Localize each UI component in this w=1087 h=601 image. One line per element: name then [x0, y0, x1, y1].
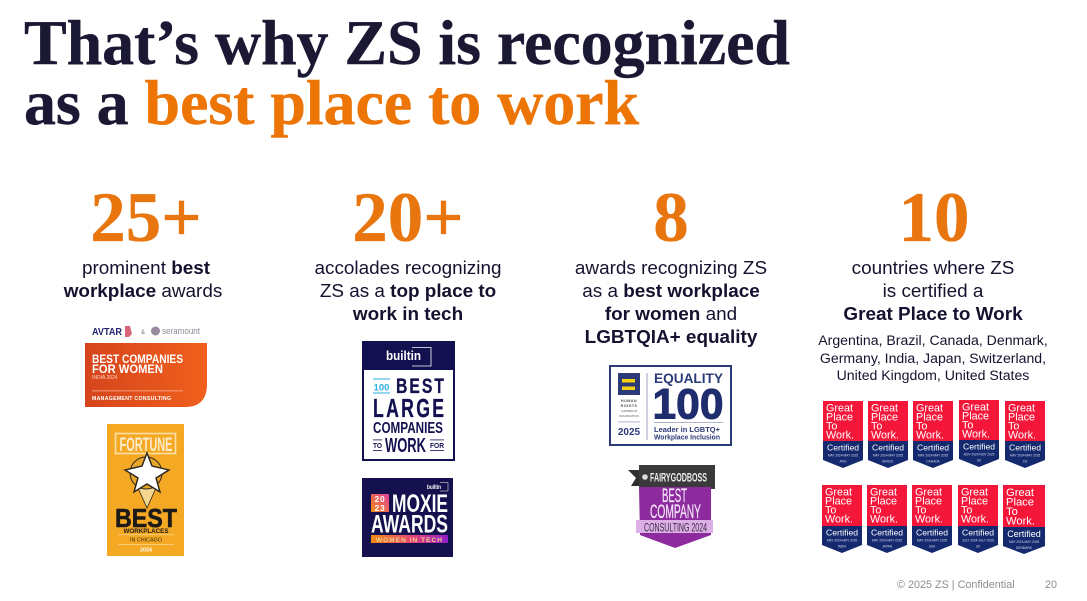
- badge: Great Place to Work Argentina: [823, 401, 863, 468]
- badge: Great Place to Work India: [822, 485, 862, 553]
- badge: Great Place to Work CH top row: MAY 2024-MAY 2025: [1010, 454, 1040, 458]
- badge: Fortune Best Workplaces in Chicago: WORKPLACES: [124, 528, 168, 535]
- text: women and LGBTQIA+ awards: [575, 258, 767, 348]
- badge: Fairygodboss Best Company: CONSULTING 2024: [644, 520, 707, 534]
- badge: HRC Equality 100: [610, 366, 731, 445]
- text: best workplace awards: prominent best: [82, 258, 210, 279]
- badge: Built In 100 Best Large Companies: TO: [373, 441, 382, 450]
- badge: Great Place to Work Argentina: Place: [826, 412, 853, 424]
- badge: Great Place to Work USA: [912, 485, 952, 553]
- stat: 10: 10: [898, 179, 970, 257]
- badge: Great Place to Work USA: Place: [915, 496, 942, 508]
- badge: Great Place to Work UK bottom row: Certified: [962, 528, 994, 538]
- badge: Built In Moxie Awards: [362, 478, 453, 557]
- badge: Great Place to Work Argentina: Great: [826, 402, 853, 414]
- badge: HRC Equality 100: 100: [652, 380, 724, 428]
- badge: Great Place to Work Brazil: [868, 401, 908, 468]
- footer: page number: 20: [1045, 579, 1057, 591]
- badge: Avtar Best Companies for Women: BEST COMPANIES: [92, 352, 183, 366]
- badge: Fortune Best Workplaces in Chicago: 2024: [140, 548, 152, 554]
- badge: HRC Equality 100: Workplace Inclusion: [654, 434, 720, 442]
- badge: Great Place to Work Canada: MAY 2024-MAY 2025: [918, 454, 948, 458]
- text: Great Place to Work countries: [843, 258, 1023, 325]
- badge: Great Place to Work UK top row: To: [962, 420, 973, 432]
- badge: Great Place to Work Canada: CANADA: [926, 460, 941, 464]
- badge: Great Place to Work Canada: To: [916, 420, 927, 432]
- badge: Great Place to Work Argentina: Certified: [827, 442, 859, 452]
- badge: Great Place to Work Argentina: ARG: [840, 460, 847, 464]
- badge: Built In Moxie Awards: MOXIE: [392, 490, 448, 518]
- badge: Great Place to Work Argentina: MAY 2024-MAY 2025: [828, 454, 858, 458]
- badge: Built In 100 Best Large Companies: WORK: [385, 435, 426, 457]
- badge: Great Place to Work Argentina: To: [826, 420, 837, 432]
- badge: Fairygodboss Best Company: FAIRYGODBOSS: [650, 472, 707, 484]
- badge: Great Place to Work India: INDIA: [838, 544, 847, 548]
- badge: Great Place to Work Brazil: MAY 2024-MAY 2025: [873, 454, 903, 458]
- badge: HRC Equality 100: 2025: [618, 427, 641, 438]
- badge: Great Place to Work Japan: Certified: [871, 528, 903, 538]
- badge: Great Place to Work CH top row: Work.: [1008, 430, 1036, 442]
- badge: Fortune Best Workplaces in Chicago: [107, 424, 184, 556]
- badge: Great Place to Work Argentina: Work.: [826, 430, 854, 442]
- badge: Great Place to Work UK top row: Work.: [962, 428, 990, 440]
- badge: HRC Equality 100: FOUNDATION: [619, 414, 639, 418]
- badge: Great Place to Work CH top row: Place: [1008, 412, 1035, 424]
- badge: Great Place to Work Denmark: Great: [1006, 487, 1035, 499]
- badge: Great Place to Work USA: Certified: [916, 528, 948, 538]
- badge: Built In Moxie Awards: 23: [374, 503, 386, 513]
- badge: Great Place to Work UK bottom row: To: [961, 504, 972, 516]
- text: list of countries: [818, 332, 1048, 383]
- badge: Great Place to Work CH top row: Certified: [1009, 442, 1041, 452]
- text: top place to work in tech: [315, 258, 501, 325]
- badge: Great Place to Work USA: To: [915, 504, 926, 516]
- badge: Great Place to Work Japan: Great: [870, 486, 897, 498]
- badge: Avtar Best Companies for Women: seramount: [162, 326, 200, 336]
- badge: Great Place to Work Canada: Great: [916, 402, 943, 414]
- badge: Great Place to Work USA: MAY 2024-MAY 2025: [917, 538, 947, 542]
- badge: Great Place to Work Brazil: Work.: [871, 430, 899, 442]
- badge: Great Place to Work Denmark: Place: [1006, 496, 1034, 508]
- badge: Great Place to Work UK bottom row: UK: [976, 544, 981, 548]
- badge: Great Place to Work Brazil: Certified: [872, 442, 904, 452]
- badge: Great Place to Work India: Place: [825, 496, 852, 508]
- badge: Great Place to Work Japan: [867, 485, 907, 553]
- badge: Great Place to Work Japan: Place: [870, 496, 897, 508]
- badge: Avtar Best Companies for Women: &: [141, 330, 145, 336]
- text: best workplace awards: workplace awards: [64, 281, 222, 302]
- title: That’s why ZS is recognized: [24, 7, 790, 78]
- badge: Great Place to Work Canada: Certified: [917, 442, 949, 452]
- badge: Great Place to Work CH top row: [1005, 401, 1045, 468]
- footer: copyright: © 2025 ZS | Confidential: [897, 579, 1015, 591]
- badge: Great Place to Work Brazil: BRAZIL: [882, 460, 894, 464]
- badge: HRC Equality 100: RIGHTS: [621, 404, 637, 408]
- text: list of countries: United Kingdom, United States: [837, 367, 1029, 383]
- badge: Great Place to Work India: Certified: [826, 528, 858, 538]
- text: top place to work in tech: work in tech: [353, 304, 463, 325]
- stat: 8: 8: [653, 179, 689, 257]
- badge: Avtar Best Companies for Women: [85, 326, 207, 407]
- text: women and LGBTQIA+ awards: awards recognizing ZS: [575, 258, 767, 279]
- badge: Built In Moxie Awards: WOMEN IN TECH: [376, 537, 442, 544]
- badge: Built In 100 Best Large Companies: [362, 341, 455, 461]
- badge: Great Place to Work Japan: MAY 2024-MAY 2025: [872, 538, 902, 542]
- badge: Avtar Best Companies for Women: INDIA 2024: [92, 375, 118, 381]
- badge: Great Place to Work Denmark: [1003, 485, 1045, 554]
- badge: Great Place to Work Canada: Place: [916, 412, 943, 424]
- badge: Great Place to Work Denmark: Certified: [1007, 529, 1041, 539]
- badge: Great Place to Work Brazil: Great: [871, 402, 898, 414]
- badge: Avtar Best Companies for Women: AVTAR: [92, 326, 122, 338]
- badge: Great Place to Work Denmark: To: [1006, 506, 1018, 518]
- badge: Built In Moxie Awards: builtin: [427, 484, 441, 491]
- badge: Great Place to Work Canada: Work.: [916, 430, 944, 442]
- text: Great Place to Work countries: is certified a: [883, 281, 983, 302]
- badge: HRC Equality 100: EQUALITY: [654, 371, 723, 386]
- badge: Great Place to Work UK top row: [959, 400, 999, 467]
- title: [24, 7, 790, 138]
- text: best workplace awards: [64, 258, 222, 302]
- badge: HRC Equality 100: HUMAN: [621, 399, 637, 403]
- badge: Built In Moxie Awards: AWARDS: [371, 510, 448, 538]
- badge: Great Place to Work India: To: [825, 504, 836, 516]
- badge: Fairygodboss Best Company: COMPANY: [650, 501, 701, 523]
- title: as a best place to work: [24, 67, 639, 138]
- text: top place to work in tech: accolades recognizing: [315, 258, 501, 279]
- badge: HRC Equality 100: CAMPAIGN: [621, 409, 637, 413]
- badge: HRC Equality 100: Leader in LGBTQ+: [654, 427, 720, 434]
- badge: Great Place to Work Brazil: Place: [871, 412, 898, 424]
- badge: Great Place to Work UK bottom row: Work.: [961, 514, 989, 526]
- badge: Great Place to Work Canada: [913, 401, 953, 468]
- stat: 20+: 20+: [352, 179, 464, 257]
- badge: Fortune Best Workplaces in Chicago: FORTUNE: [120, 435, 172, 456]
- badge: Fortune Best Workplaces in Chicago: IN CHICAGO: [130, 538, 162, 544]
- badge: Great Place to Work India: Work.: [825, 514, 853, 526]
- badge: Built In 100 Best Large Companies: COMPANIES: [373, 420, 443, 437]
- badge: Great Place to Work CH top row: To: [1008, 420, 1019, 432]
- badge: Built In 100 Best Large Companies: BEST: [396, 374, 446, 398]
- badge: Built In 100 Best Large Companies: FOR: [430, 441, 445, 450]
- stat: 25+: 25+: [90, 179, 202, 257]
- badge: Great Place to Work Denmark: MAY 2024-MAY 2025: [1009, 540, 1039, 544]
- badge: Avtar Best Companies for Women: MANAGEMENT CONSULTING: [92, 396, 171, 402]
- badge: Great Place to Work UK bottom row: JULY 2024-JULY 2025: [962, 538, 994, 542]
- badge: Great Place to Work Japan: JAPAN: [882, 544, 893, 548]
- badge: Great Place to Work Denmark: Work.: [1006, 516, 1035, 528]
- badge: Great Place to Work USA: USA: [929, 544, 936, 548]
- badge: Great Place to Work CH top row: CH: [1023, 460, 1028, 464]
- badge: Great Place to Work CH top row: Great: [1008, 402, 1035, 414]
- badge: Great Place to Work UK bottom row: Place: [961, 496, 988, 508]
- badge: Great Place to Work UK top row: NOV 2024-NOV 2025: [964, 452, 995, 456]
- text: top place to work in tech: ZS as a top place to: [320, 281, 496, 302]
- text: women and LGBTQIA+ awards: as a best workplace: [582, 281, 760, 302]
- badge: Fortune Best Workplaces in Chicago: BEST: [115, 503, 177, 533]
- badge: Great Place to Work Brazil: To: [871, 420, 882, 432]
- badge: Great Place to Work UK top row: Great: [962, 402, 989, 414]
- badge: Great Place to Work USA: Work.: [915, 514, 943, 526]
- badge: Great Place to Work UK bottom row: [958, 485, 998, 553]
- text: Great Place to Work countries: Great Place to Work: [843, 304, 1023, 325]
- badge: Great Place to Work UK bottom row: Great: [961, 486, 988, 498]
- text: list of countries: Germany, India, Japan, Switzerland,: [820, 350, 1046, 366]
- badge: Great Place to Work Japan: Work.: [870, 514, 898, 526]
- badge: Great Place to Work Japan: To: [870, 504, 881, 516]
- text: women and LGBTQIA+ awards: for women and: [605, 304, 737, 325]
- badge: Built In Moxie Awards: 20: [374, 494, 386, 504]
- badge: Great Place to Work UK top row: Place: [962, 410, 989, 422]
- badge: Great Place to Work USA: Great: [915, 486, 942, 498]
- badge: Great Place to Work India: MAY 2024-MAY 2025: [827, 538, 857, 542]
- text: Great Place to Work countries: countries where ZS: [852, 258, 1014, 279]
- badge: Great Place to Work India: Great: [825, 486, 852, 498]
- badge: Built In 100 Best Large Companies: LARGE: [373, 394, 446, 423]
- text: women and LGBTQIA+ awards: LGBTQIA+ equality: [585, 327, 757, 348]
- badge: Built In 100 Best Large Companies: 100: [374, 382, 390, 394]
- badge: Fairygodboss Best Company: [628, 465, 715, 548]
- badge: Great Place to Work UK top row: Certified: [963, 442, 995, 452]
- badge: Great Place to Work UK top row: UK: [977, 458, 982, 462]
- badge: Fairygodboss Best Company: BEST: [662, 485, 687, 507]
- text: list of countries: Argentina, Brazil, Canada, Denmark,: [818, 332, 1048, 348]
- badge: Built In 100 Best Large Companies: builtin: [386, 348, 421, 363]
- badge: Great Place to Work Denmark: DENMARK: [1016, 546, 1033, 550]
- badge: Avtar Best Companies for Women: FOR WOMEN: [92, 362, 163, 376]
